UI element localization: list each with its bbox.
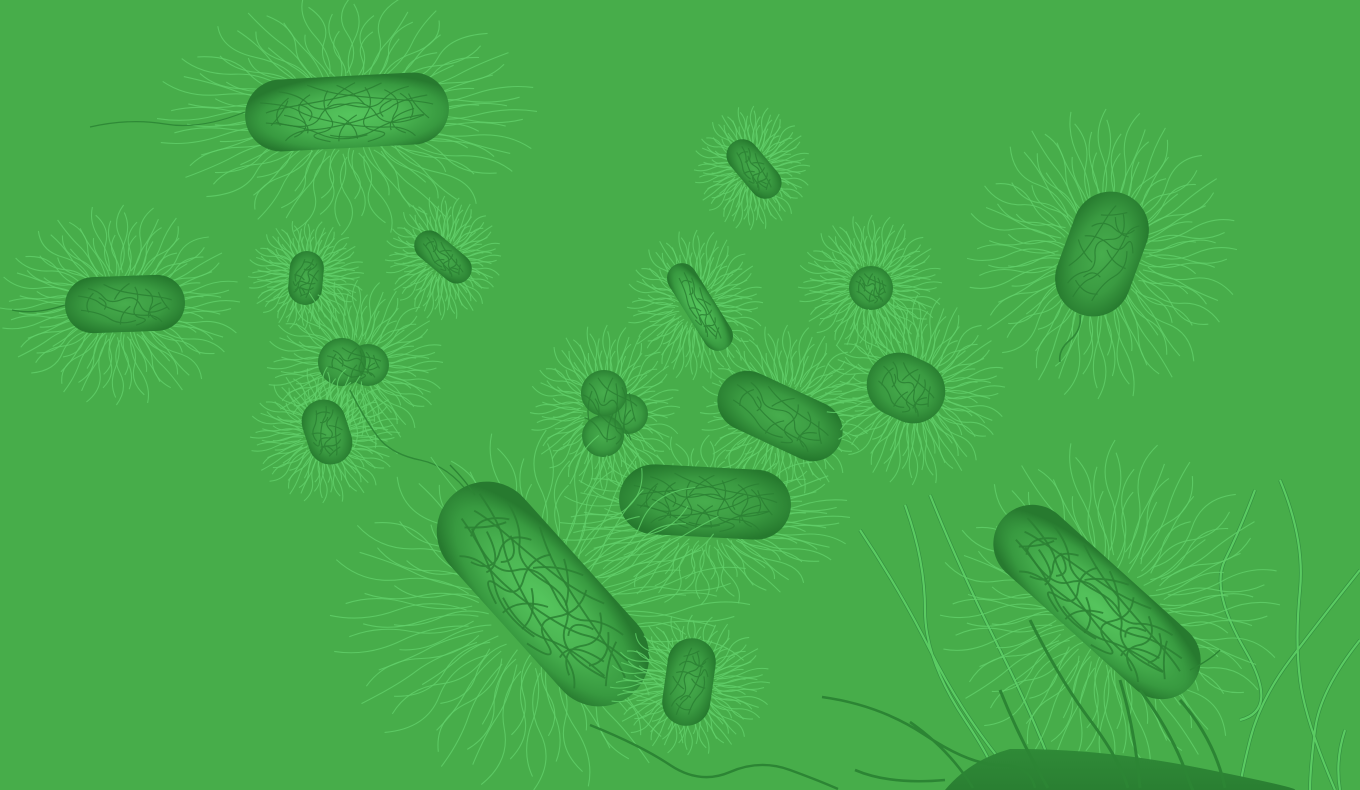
bacterium: centre horizontal rod <box>549 428 861 612</box>
cell body <box>64 274 186 334</box>
pili <box>693 318 877 502</box>
cell body <box>708 361 852 471</box>
bacterium: three-lobed cluster <box>524 318 686 502</box>
cell body <box>659 635 719 729</box>
cell body <box>720 133 788 205</box>
pili <box>244 362 406 508</box>
bacterium: lower left short <box>244 362 470 508</box>
pili <box>689 101 815 235</box>
pili <box>0 197 249 413</box>
long flagella, bottom right <box>860 480 1360 790</box>
pili <box>622 224 768 386</box>
cell body <box>243 71 451 153</box>
cell body <box>318 338 389 386</box>
bacterium: small, upper left cluster <box>243 216 369 334</box>
bacterium: small diagonal <box>380 191 506 325</box>
cell body <box>617 463 793 541</box>
cell body <box>1044 181 1160 327</box>
pili <box>524 318 686 502</box>
cell body <box>849 266 893 310</box>
pili <box>792 209 948 361</box>
bacterium: cropped rod at bottom edge <box>945 749 1295 790</box>
bacterium: round coccus <box>792 209 948 361</box>
pili <box>313 416 767 790</box>
flagellum <box>90 112 245 127</box>
bacterium: right of centre oval <box>818 288 1012 492</box>
cell body <box>296 394 358 470</box>
bacterium: dividing left pair <box>260 273 450 457</box>
bacterium: centre peanut <box>693 318 877 502</box>
bacterium: slim diagonal rod <box>622 224 768 386</box>
dark flagella <box>12 305 1225 790</box>
flagellum <box>1060 315 1080 362</box>
cell body <box>661 257 739 357</box>
pili <box>956 98 1248 410</box>
pili <box>927 427 1293 790</box>
pili <box>260 273 450 457</box>
bacterium: small bottom centre <box>604 609 776 761</box>
bacterium: large diagonal rod <box>313 416 767 790</box>
cell body <box>581 370 648 457</box>
flagellum <box>350 390 470 495</box>
bacterium: left rod <box>0 197 249 413</box>
cell body <box>408 224 478 290</box>
pili <box>604 609 776 761</box>
bacterium: top rod <box>90 0 552 244</box>
cell body <box>287 250 325 306</box>
cell body <box>977 489 1217 715</box>
bacterium: top centre small <box>689 101 815 235</box>
pili <box>549 428 861 612</box>
pili <box>818 288 1012 492</box>
cell body <box>856 342 956 434</box>
bacterium: large upper right <box>956 98 1248 410</box>
pili <box>142 0 552 244</box>
bacterium: large lower right rod <box>927 427 1293 790</box>
pili <box>380 191 506 325</box>
pili <box>243 216 369 334</box>
cell body <box>416 461 670 727</box>
